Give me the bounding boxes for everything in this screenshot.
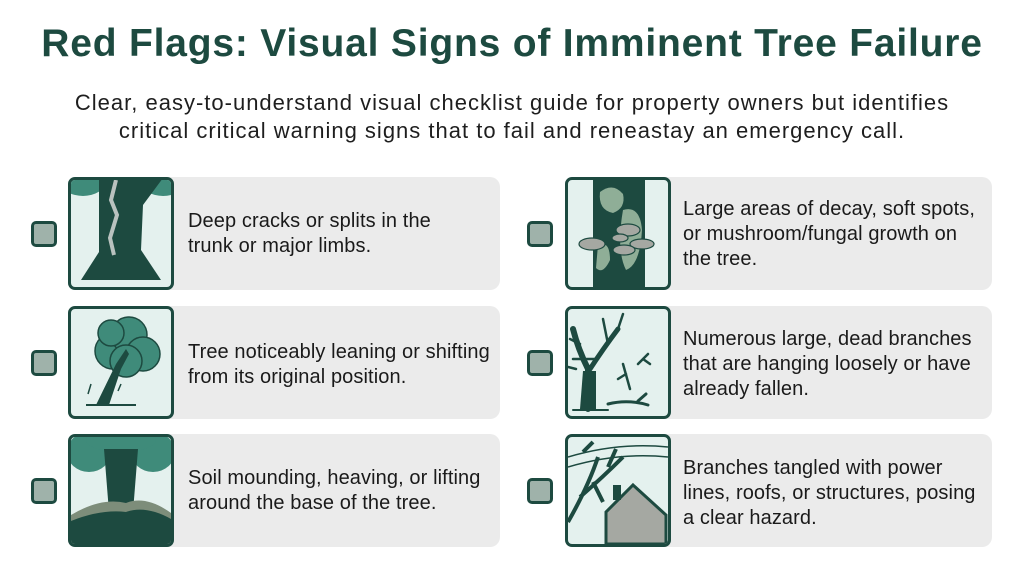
text [683,198,975,270]
text: Tree noticeably leaning or shifting [188,341,490,363]
text: Deep cracks or splits in the [188,210,431,232]
item: soil [31,434,500,547]
card [565,177,992,290]
card [68,306,500,419]
text [683,457,976,529]
text: the tree. [683,248,757,270]
text: a clear hazard. [683,507,817,529]
checkbox [527,478,553,504]
text: around the base of the tree. [188,492,437,514]
subtitle [75,90,949,143]
icon: dead tree [565,306,671,419]
card [68,177,500,290]
text: Soil mounding, heaving, or lifting [188,467,480,489]
checkbox [31,350,57,376]
text: Numerous large, dead branches [683,328,972,350]
text [188,210,431,257]
item: dead branches [527,306,992,419]
card [68,434,500,547]
text: or mushroom/fungal growth on [683,223,957,245]
text: from its original position. [188,366,406,388]
icon: fungal decay [565,177,671,290]
text: already fallen. [683,378,809,400]
icon: tree near house and lines [565,434,671,547]
subtitle: critical critical warning signs that to fail and reneastay an emergency call. [119,118,905,143]
text: Branches tangled with power [683,457,943,479]
icon: cracked trunk [68,177,174,290]
text: lines, roofs, or structures, posing [683,482,976,504]
text [683,328,972,400]
checkbox [527,350,553,376]
text: Large areas of decay, soft spots, [683,198,975,220]
subtitle: Clear, easy-to-understand visual checklist guide for property owners but identifies [75,90,949,115]
text [188,467,480,514]
item: power lines [527,434,992,547]
title: Red Flags: Visual Signs of Imminent Tree Failure [41,22,983,65]
checkbox [31,221,57,247]
card [565,306,992,419]
item: decay [527,177,992,290]
checkbox [527,221,553,247]
icon: leaning tree [68,306,174,419]
text [188,341,490,388]
checkbox [31,478,57,504]
item: cracks [31,177,500,290]
icon: soil mound [68,434,174,547]
item: leaning [31,306,500,419]
card [565,434,992,547]
text: trunk or major limbs. [188,235,371,257]
text: that are hanging loosely or have [683,353,971,375]
